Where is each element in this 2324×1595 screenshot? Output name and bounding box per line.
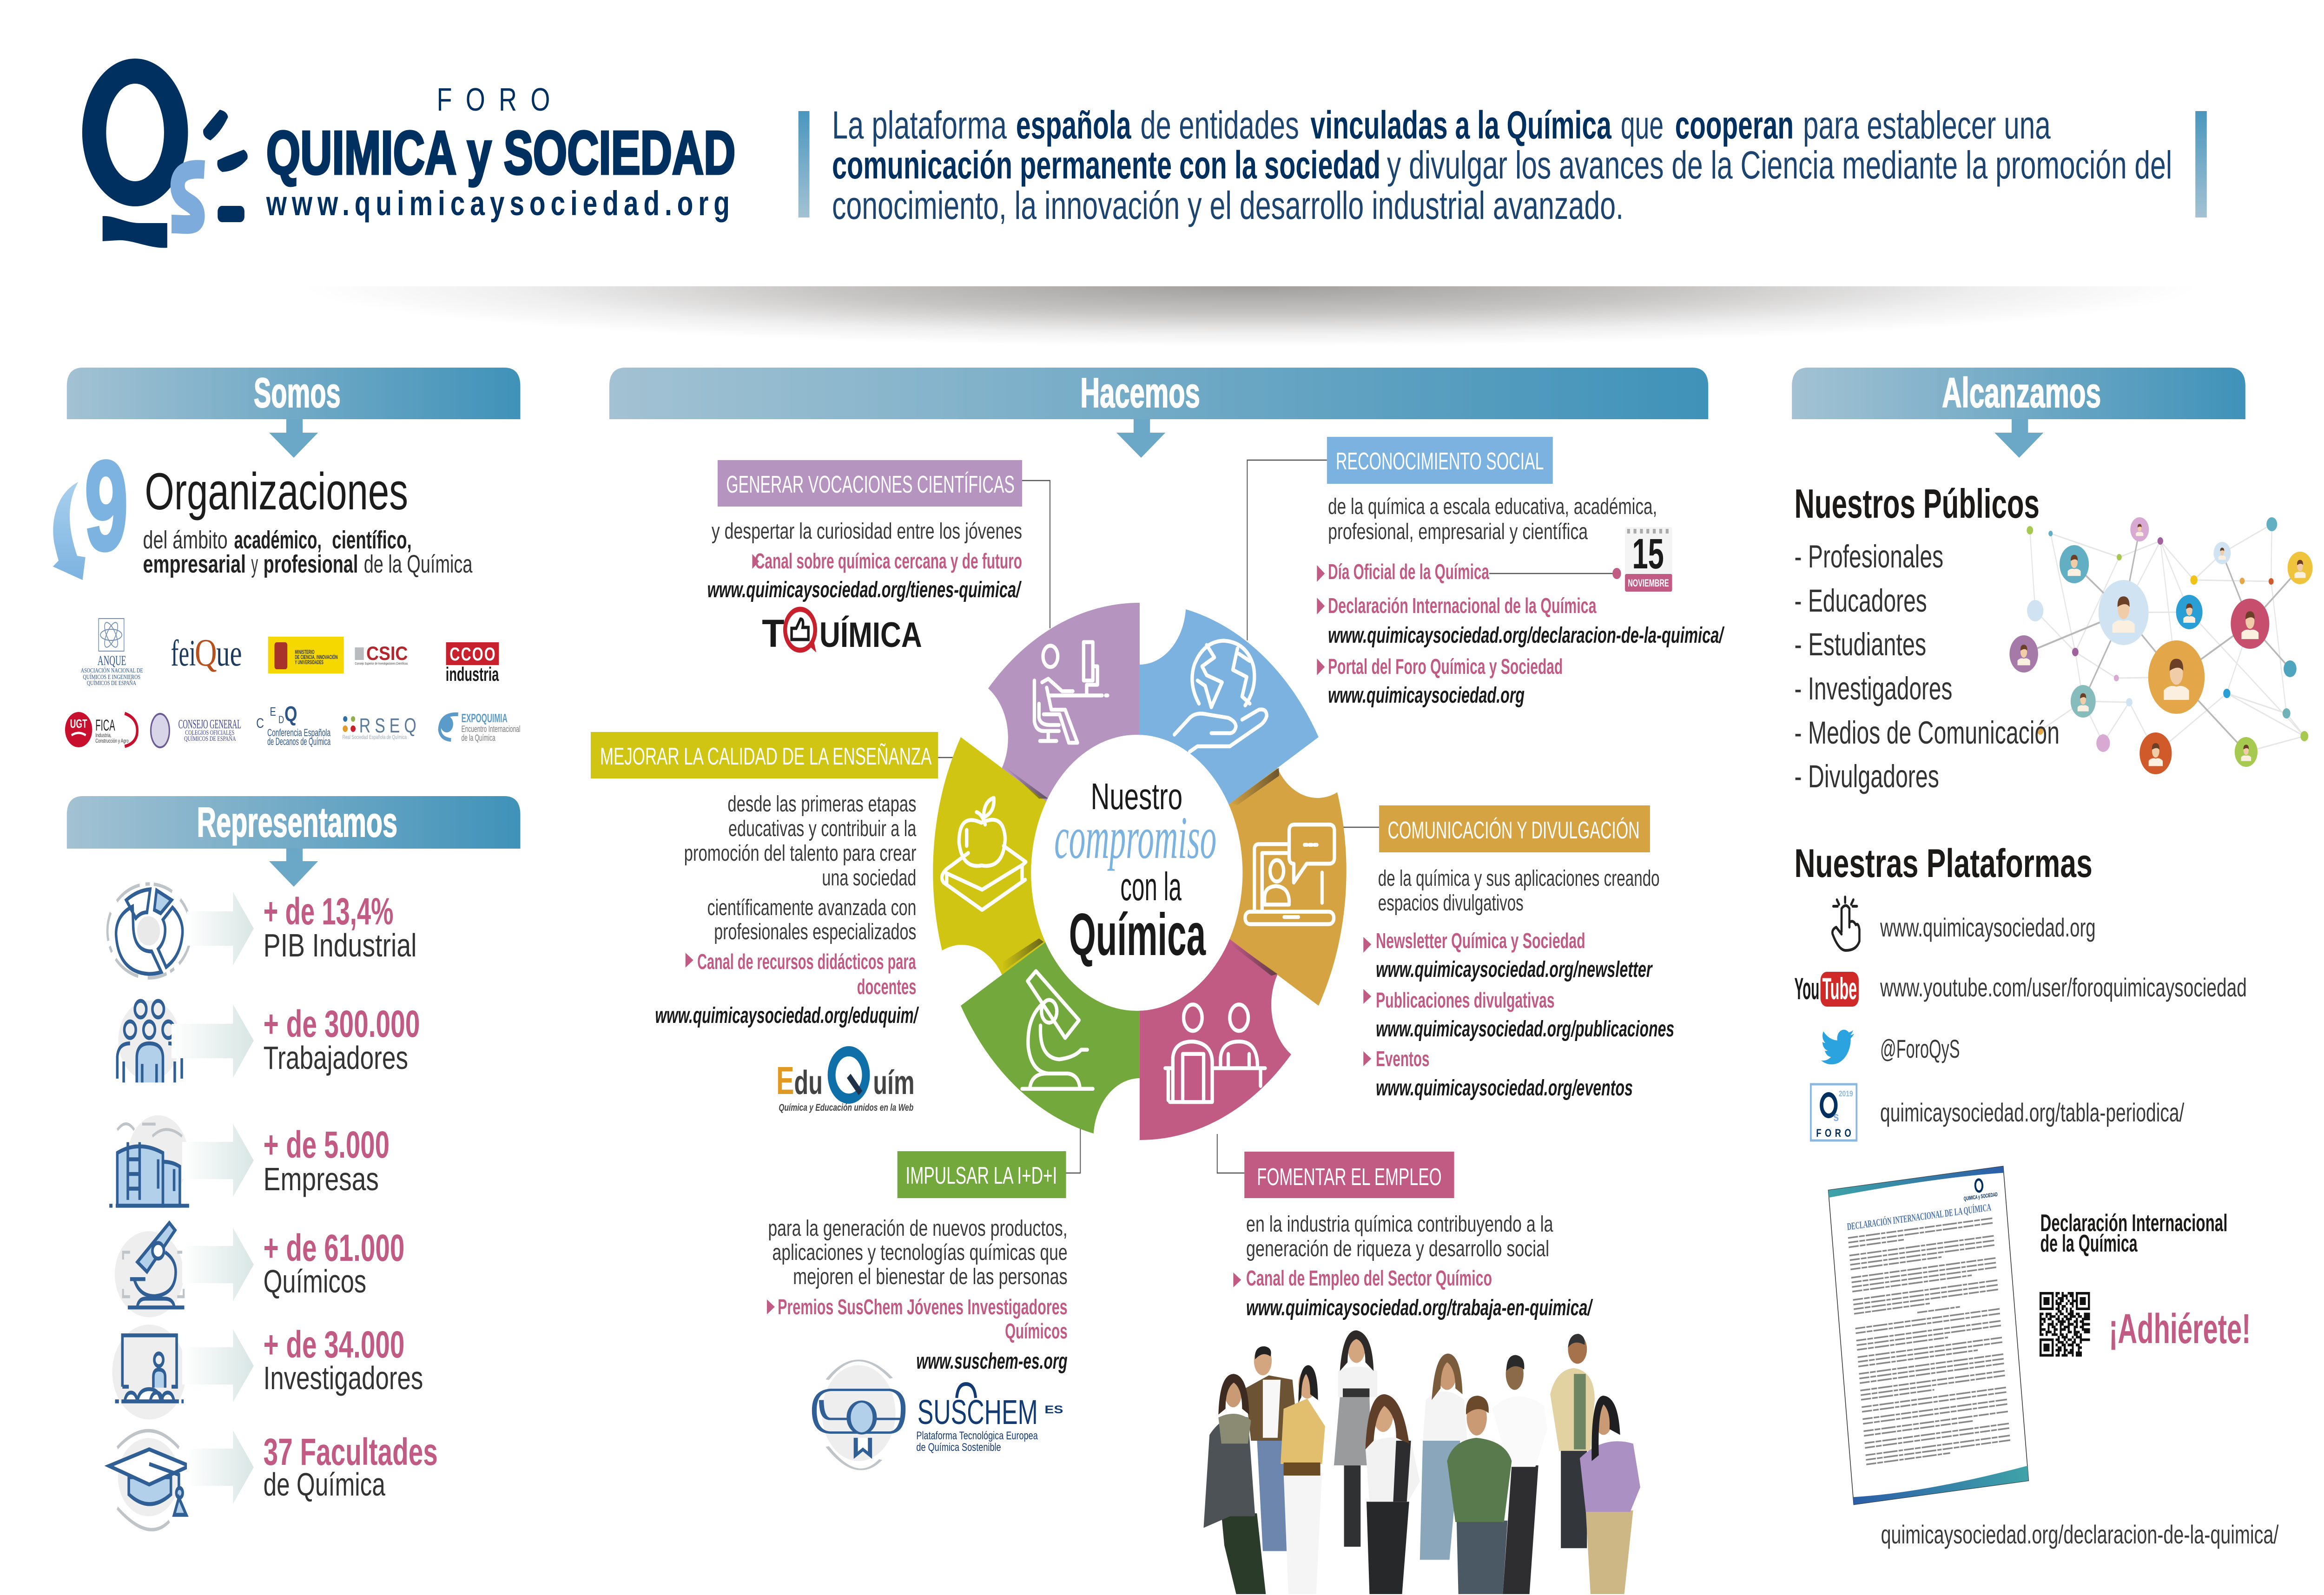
block: mejorar la calidad de la enseñanza: desde las primeras etapas	[727, 791, 916, 817]
document: Declaración Internacional de la Química	[1829, 1167, 2028, 1504]
logo: ANQUE: QUÍMICOS E INGENIEROS	[83, 673, 140, 680]
icon: diploma scroll	[814, 1360, 903, 1470]
logo wordmark: FORO	[437, 81, 550, 118]
block: impulsar la I+D+i: www.suschem-es.org	[916, 1349, 1068, 1374]
icon: people at desk	[1165, 1004, 1265, 1102]
block: mejorar la calidad de la enseñanza: una sociedad	[822, 865, 916, 890]
heading: Alcanzamos: Alcanzamos	[1942, 369, 2101, 416]
big number 9 with curved arrow	[53, 435, 128, 580]
text: Organizaciones: Organizaciones	[145, 463, 408, 521]
logo: Conferencia de Decanos: E	[270, 705, 276, 718]
intro statement: que	[1621, 103, 1664, 147]
block: impulsar la I+D+i: para la generación de nuevos productos,	[768, 1216, 1068, 1241]
panel: Hacemos	[591, 368, 1725, 1594]
logo: ANQUE: QUÍMICOS DE ESPAÑA	[87, 679, 136, 686]
call to action: Adhiérete: ¡Adhiérete!	[2109, 1305, 2251, 1352]
logo: feiQue: ue	[216, 633, 242, 674]
block: mejorar la calidad de la enseñanza	[591, 732, 938, 1113]
icon: microscope	[115, 1223, 185, 1317]
block: mejorar la calidad de la enseñanza: Canal de recursos didácticos para	[697, 950, 916, 974]
icon: calendar 15 noviembre	[1625, 527, 1672, 592]
block: fomentar el empleo: www.quimicaysociedad.org/trabaja-en-quimica/	[1246, 1295, 1593, 1320]
text: Declaración Internacional: de la Química	[2040, 1230, 2138, 1257]
logo: CCOO industria	[446, 642, 499, 685]
logo: Ministerio	[268, 637, 344, 673]
logo: SusChem España: de Química Sostenible	[916, 1441, 1001, 1454]
icon: calendar 15 noviembre: NOVIEMBRE	[1628, 578, 1669, 589]
intro statement: y divulgar los avances de la Ciencia mediante la promoción del	[1387, 143, 2172, 187]
wheel segment: vocaciones	[965, 539, 1229, 871]
stat: químicos: + de 61.000	[264, 1227, 404, 1269]
stat: investigadores: + de 34.000	[264, 1324, 404, 1366]
logo: CSIC: Consejo Superior de Investigaciones Científicas	[355, 662, 408, 666]
stat icons	[107, 884, 191, 1529]
logo: Ministerio: Y UNIVERSIDADES	[295, 659, 324, 666]
platform: Twitter	[1821, 1030, 1960, 1064]
block: reconocimiento social: profesional, empresarial y científica	[1328, 519, 1588, 544]
logo: Consejo General: CONSEJO GENERAL	[178, 718, 241, 732]
text: Organizaciones: académico,	[234, 526, 322, 554]
stat: químicos	[264, 1227, 404, 1300]
platform: tabla periódica: quimicaysociedad.org/tabla-periodica/	[1880, 1098, 2184, 1127]
logo: Expoquimia: Encuentro Internacional	[462, 724, 520, 734]
block: comunicación y divulgación: de la química y sus aplicaciones creando	[1378, 866, 1660, 891]
logo: ANQUE	[81, 619, 143, 686]
logo: Expoquimia: EXPOQUIMIA	[462, 711, 508, 725]
logo: EduQuim: uím	[873, 1064, 915, 1101]
text: Organizaciones: del ámbito	[143, 526, 228, 554]
block: comunicación y divulgación: Publicaciones divulgativas	[1376, 989, 1555, 1012]
list of audiences: - Divulgadores	[1795, 758, 1939, 795]
heading: Representamos: Representamos	[197, 799, 397, 846]
heading: Somos: Somos	[254, 369, 341, 416]
logo wordmark	[266, 81, 735, 223]
logo: T Química	[762, 609, 922, 655]
logo: SusChem España: ES	[1044, 1404, 1063, 1416]
stat: facultades: de Química	[264, 1466, 385, 1503]
figure: man white shirt	[1492, 1355, 1547, 1594]
wheel segment: enseñanza	[876, 670, 1140, 1002]
block: comunicación y divulgación: www.quimicaysociedad.org/newsletter	[1376, 957, 1653, 982]
logo: Ministerio: MINISTERIO	[295, 649, 315, 655]
block: impulsar la I+D+i: aplicaciones y tecnologías químicas que	[772, 1240, 1068, 1265]
block: mejorar la calidad de la enseñanza: promoción del talento para crear	[684, 841, 916, 866]
logo: UGT FICA: Construcción y Agro	[95, 738, 129, 744]
logo: RSEQ: RSEQ	[359, 714, 416, 737]
wheel centre: con la	[1120, 865, 1182, 909]
icon: tanks	[109, 1115, 190, 1206]
platform: YouTube: www.youtube.com/user/foroquimicaysociedad	[1880, 973, 2247, 1002]
logo: EduQuim	[776, 1051, 915, 1113]
platform: tabla periódica	[1811, 1084, 2184, 1140]
logo: CCOO industria: CCOO	[449, 644, 495, 665]
big number 9 with curved arrow: 9	[85, 435, 128, 576]
logo: Ministerio: DE CIENCIA, INNOVACIÓN	[295, 654, 338, 660]
stat: PIB	[264, 890, 417, 964]
icon: teacher	[112, 1325, 186, 1419]
block: comunicación y divulgación: Eventos	[1376, 1047, 1430, 1071]
platform: website: www.quimicaysociedad.org	[1880, 913, 2096, 942]
QR code	[2040, 1293, 2090, 1355]
stat: químicos: Químicos	[264, 1263, 366, 1300]
heading: Hacemos	[609, 368, 1708, 458]
block: mejorar la calidad de la enseñanza: científicamente avanzada con	[707, 895, 916, 920]
block: mejorar la calidad de la enseñanza: profesionales especializados	[714, 919, 916, 944]
block: reconocimiento social: www.quimicaysociedad.org/declaracion-de-la-quimica/	[1328, 623, 1725, 648]
block: reconocimiento social: www.quimicaysociedad.org	[1328, 683, 1525, 708]
block: impulsar la I+D+i: IMPULSAR LA I+D+I	[905, 1162, 1057, 1189]
logo: EduQuim: Química y Educación unidos en la Web	[779, 1102, 913, 1113]
logo: CSIC: CSIC	[366, 642, 408, 664]
block: generar vocaciones científicas	[707, 460, 1022, 655]
heading: Hacemos: Hacemos	[1080, 369, 1200, 416]
icon: graduation cap	[109, 1431, 190, 1529]
block: fomentar el empleo: generación de riqueza y desarrollo social	[1246, 1236, 1549, 1261]
block: mejorar la calidad de la enseñanza: docentes	[857, 975, 916, 999]
logo: Consejo General: COLEGIOS OFICIALES	[185, 729, 234, 736]
platform: YouTube: Tube	[1822, 972, 1857, 1006]
block: comunicación y divulgación: espacios divulgativos	[1378, 890, 1524, 916]
logo: T Química: UÍMICA	[819, 615, 922, 655]
platform: tabla periódica: s	[1833, 1109, 1839, 1124]
text: Organizaciones: empresarial	[143, 550, 246, 578]
logo: UGT FICA	[65, 712, 137, 747]
figure: woman grey skirt	[1334, 1330, 1377, 1547]
document: Declaración Internacional de la Química: DECLARACIÓN INTERNACIONAL DE LA QUÍMICA	[1847, 1202, 1992, 1232]
wheel icons	[942, 641, 1334, 1102]
logo: SusChem España: Plataforma Tecnológica Europea	[916, 1430, 1038, 1442]
platform: tabla periódica: FORO	[1816, 1127, 1851, 1140]
connector lines	[938, 460, 1379, 1173]
text: Organizaciones: científico,	[332, 526, 412, 554]
wheel segment: empleo	[1050, 871, 1314, 1204]
logo: Consejo General: QUÍMICOS DE ESPAÑA	[184, 735, 236, 742]
logo: feiQue: Q	[195, 631, 217, 674]
logo: UGT FICA: UGT	[70, 717, 87, 731]
logo: SusChem España: SUSCHEM	[918, 1393, 1038, 1431]
block: mejorar la calidad de la enseñanza: educativas y contribuir a la	[728, 816, 917, 841]
block: fomentar el empleo: Canal de Empleo del Sector Químico	[1246, 1266, 1492, 1290]
logo: RSEQ	[343, 714, 416, 740]
logo: Expoquimia: de la Química	[462, 733, 495, 743]
logo: Conferencia de Decanos: C	[256, 715, 264, 731]
heading: Alcanzamos	[1792, 368, 2245, 458]
logo: Conferencia de Decanos: Conferencia Española	[267, 727, 330, 739]
logo: feiQue: fei	[171, 633, 196, 674]
block: reconocimiento social: Día Oficial de la Química	[1328, 560, 1490, 584]
list of audiences: - Profesionales	[1795, 539, 1943, 575]
text: Declaración Internacional	[2040, 1209, 2227, 1257]
block: impulsar la I+D+i: mejoren el bienestar de las personas	[793, 1264, 1068, 1289]
list of audiences	[1795, 539, 2060, 795]
stat: trabajadores: + de 300.000	[264, 1003, 420, 1045]
intro statement: conocimiento, la innovación y el desarrollo industrial avanzado.	[832, 184, 1624, 227]
logo: UGT FICA: FICA	[95, 717, 115, 734]
wheel centre: Nuestro	[1091, 776, 1182, 817]
stat: investigadores: Investigadores	[264, 1360, 423, 1397]
intro statement: La plataforma	[832, 103, 1007, 147]
block: fomentar el empleo: en la industria química contribuyendo a la	[1246, 1212, 1553, 1237]
stat: empresas: + de 5.000	[264, 1124, 390, 1166]
stat arrows	[172, 892, 254, 1504]
intro statement: para establecer una	[1803, 103, 2051, 147]
logo: Expoquimia	[440, 711, 520, 743]
logo mark	[82, 59, 248, 248]
platform: website	[1832, 897, 2096, 950]
logo: Conferencia de Decanos: Q	[284, 702, 297, 726]
figure: woman white shirt	[1420, 1353, 1467, 1560]
icon: globe in hand	[1175, 641, 1267, 751]
block: reconocimiento social	[1317, 437, 1725, 708]
stat: PIB: + de 13,4%	[264, 890, 394, 933]
panel: Representamos	[67, 796, 520, 1529]
logo: Conferencia de Decanos	[256, 702, 330, 748]
icon: workers	[117, 1000, 182, 1082]
list of audiences: - Educadores	[1795, 583, 1927, 619]
icon: microscope	[1022, 971, 1093, 1089]
text: Declaración Internacional: Declaración Internacional	[2040, 1209, 2227, 1236]
stat: facultades	[264, 1431, 438, 1503]
block: comunicación y divulgación: COMUNICACIÓN Y DIVULGACIÓN	[1388, 817, 1640, 844]
stat: facultades: 37 Facultades	[264, 1431, 438, 1473]
block: impulsar la I+D+i: Químicos	[1005, 1319, 1068, 1343]
heading: Somos	[67, 368, 520, 458]
figure: man brown jacket	[1245, 1346, 1301, 1551]
icon: calendar 15 noviembre: 15	[1632, 530, 1664, 578]
block: comunicación y divulgación: Newsletter Química y Sociedad	[1376, 929, 1585, 953]
figure: woman purple top	[1580, 1396, 1640, 1594]
figure: woman center	[1365, 1394, 1420, 1594]
intro statement	[799, 103, 2207, 227]
figure: woman yellow top	[1281, 1365, 1325, 1594]
platform: Twitter: @ForoQyS	[1880, 1035, 1960, 1063]
heading: Representamos	[67, 796, 520, 887]
intro statement: cooperan	[1675, 103, 1794, 147]
logo: Consejo General	[151, 714, 241, 747]
heading: Nuestros Públicos: Nuestros Públicos	[1795, 481, 2040, 527]
stat: trabajadores: Trabajadores	[264, 1040, 408, 1076]
text: Organizaciones: de la Química	[364, 550, 473, 578]
stat: investigadores	[264, 1324, 423, 1397]
block: reconocimiento social: Declaración Internacional de la Química	[1328, 594, 1597, 618]
logo: CSIC	[355, 642, 408, 666]
logo: feiQue	[171, 631, 242, 674]
block: impulsar la I+D+i	[767, 1151, 1068, 1470]
organisation logos	[65, 619, 520, 748]
logo: EduQuim: du	[794, 1064, 823, 1101]
intro statement: española	[1016, 103, 1132, 147]
block: generar vocaciones científicas: GENERAR VOCACIONES CIENTÍFICAS	[726, 471, 1015, 498]
icon: person at computer	[1034, 642, 1108, 743]
document: Declaración Internacional de la Química: QUIMICA y SOCIEDAD	[1963, 1191, 1998, 1202]
icon: pie chart	[107, 884, 191, 978]
block: fomentar el empleo	[1233, 1152, 1593, 1320]
wheel segment: reconocimiento social	[1140, 609, 1319, 871]
block: reconocimiento social: RECONOCIMIENTO SOCIAL	[1336, 448, 1544, 475]
block: reconocimiento social: de la química a escala educativa, académica,	[1328, 494, 1657, 519]
block: generar vocaciones científicas: y despertar la curiosidad entre los jóvenes	[712, 519, 1022, 544]
heading: Nuestras Plataformas: Nuestras Plataformas	[1795, 842, 2093, 886]
intro statement: comunicación permanente con la sociedad	[832, 143, 1380, 187]
text: Organizaciones: profesional	[264, 550, 358, 578]
block: comunicación y divulgación: www.quimicaysociedad.org/publicaciones	[1376, 1016, 1674, 1041]
logo: RSEQ: Real Sociedad Española de Química	[343, 734, 407, 740]
list of audiences: - Investigadores	[1795, 671, 1952, 707]
segment shadows	[1002, 766, 1279, 975]
stat: trabajadores	[264, 1003, 420, 1076]
icon: laptop with speech bubble	[1245, 824, 1334, 924]
logo: EduQuim: E	[776, 1059, 794, 1102]
list of audiences: - Estudiantes	[1795, 626, 1926, 663]
block: mejorar la calidad de la enseñanza: www.quimicaysociedad.org/eduquim/	[655, 1003, 919, 1028]
wheel segment: comunicación	[1140, 740, 1404, 1073]
logo wordmark: QUIMICA y SOCIEDAD	[266, 118, 735, 187]
logo: SusChem España	[916, 1384, 1063, 1454]
logo wordmark: www.quimicaysociedad.org	[266, 184, 730, 223]
icon: apple on book	[942, 798, 1026, 910]
network of people illustration	[2009, 517, 2312, 774]
block: generar vocaciones científicas: Canal sobre química cercana y de futuro	[755, 549, 1022, 573]
text: Organizaciones: y	[251, 550, 258, 578]
logo: Foro Química y Sociedad	[82, 59, 735, 248]
platform: YouTube: You	[1795, 972, 1819, 1006]
wheel segment: I+D+i	[961, 871, 1140, 1134]
logo: ANQUE: ANQUE	[98, 652, 126, 668]
block: comunicación y divulgación	[1363, 805, 1674, 1101]
commitment wheel	[876, 539, 1404, 1204]
wheel centre	[1031, 735, 1242, 1011]
block: mejorar la calidad de la enseñanza: MEJORAR LA CALIDAD DE LA ENSEÑANZA	[600, 743, 932, 770]
figure: man green sweater	[1447, 1396, 1512, 1594]
intro statement: de entidades	[1140, 103, 1299, 147]
logo: Conferencia de Decanos: D	[278, 714, 284, 726]
logo: T Química: T	[762, 612, 785, 655]
intro statement: vinculadas a la Química	[1310, 103, 1612, 147]
block: comunicación y divulgación: www.quimicaysociedad.org/eventos	[1376, 1075, 1633, 1101]
figure: woman grey jacket	[1203, 1374, 1266, 1594]
block: impulsar la I+D+i: Premios SusChem Jóvenes Investigadores	[778, 1295, 1068, 1319]
logo: Conferencia de Decanos: de Decanos de Química	[267, 736, 330, 748]
text: Organizaciones	[143, 463, 473, 578]
header shadow	[304, 286, 2198, 347]
stat: PIB: PIB Industrial	[264, 927, 417, 964]
panel: Somos	[53, 368, 520, 748]
stat: empresas	[264, 1124, 390, 1198]
logo: CCOO industria: industria	[446, 663, 499, 685]
platform: tabla periódica: 2019	[1839, 1089, 1853, 1098]
logo: UGT FICA: Industria,	[95, 732, 112, 738]
illustration: group of people	[1203, 1330, 1640, 1594]
logo: ANQUE: ASOCIACIÓN NACIONAL DE	[81, 667, 143, 674]
panel: Alcanzamos	[1792, 368, 2312, 1549]
list of audiences: - Medios de Comunicación	[1795, 715, 2060, 751]
wheel centre: Química	[1069, 902, 1206, 968]
block: fomentar el empleo: FOMENTAR EL EMPLEO	[1257, 1163, 1442, 1190]
stat: empresas: Empresas	[264, 1161, 379, 1198]
link: declaración: quimicaysociedad.org/declaracion-de-la-quimica/	[1881, 1520, 2278, 1549]
wheel centre: compromiso	[1054, 805, 1216, 871]
figure: man tan jacket	[1550, 1334, 1595, 1548]
block: generar vocaciones científicas: www.quimicaysociedad.org/tienes-quimica/	[707, 577, 1022, 602]
platform: YouTube	[1795, 972, 2247, 1007]
block: reconocimiento social: Portal del Foro Química y Sociedad	[1328, 655, 1563, 679]
